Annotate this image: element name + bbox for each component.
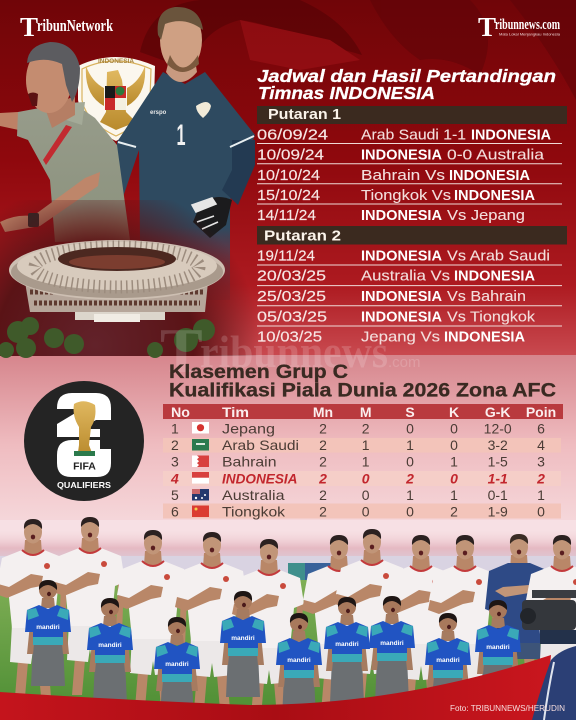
row Australia: 5 bbox=[171, 487, 179, 503]
match row 10/09/24: 0-0 Australia bbox=[447, 148, 545, 164]
goalkeeper shirt number: 1 bbox=[176, 119, 186, 152]
logo: Tribunnews.com: Mata Lokal Menjangkau Indonesia bbox=[499, 32, 561, 36]
row Tiongkok: 1-9 bbox=[488, 504, 508, 520]
crest: Indonesia garuda shield bbox=[78, 57, 155, 141]
match row 15/10/24: Tiongkok Vs bbox=[361, 188, 451, 204]
table: group C standings bbox=[163, 404, 563, 520]
row INDONESIA highlighted: 0 bbox=[450, 470, 458, 486]
panel: schedule round 2 bbox=[257, 226, 567, 346]
logo: TribunNetwork: T bbox=[20, 12, 38, 42]
match row 25/03/25: INDONESIA bbox=[361, 289, 443, 305]
match row 10/09/24 bbox=[257, 148, 545, 164]
row Bahrain: 3 bbox=[171, 454, 179, 470]
logo: TribunNetwork: ribunNetwork bbox=[37, 16, 113, 35]
match row 20/03/25: Australia Vs bbox=[361, 268, 450, 284]
watermark: Tribunnews.com: .com bbox=[388, 354, 421, 371]
row Australia bbox=[171, 487, 545, 503]
badge: FIFA 26 qualifiers: QUALIFIERS bbox=[57, 480, 111, 490]
table header: Mn bbox=[313, 404, 333, 420]
logo: TribunNetwork bbox=[20, 12, 113, 42]
row Australia: 2 bbox=[319, 487, 327, 503]
row Bahrain: 1 bbox=[450, 454, 458, 470]
row Tiongkok: 2 bbox=[450, 504, 458, 520]
match row 20/03/25 bbox=[257, 268, 536, 284]
match row 20/03/25: INDONESIA bbox=[454, 268, 536, 284]
row Bahrain: 1 bbox=[362, 454, 370, 470]
background: lower pink panel bbox=[0, 355, 576, 555]
match row 25/03/25: Vs Bahrain bbox=[447, 289, 526, 305]
row Jepang: 0 bbox=[406, 420, 414, 436]
red banner bbox=[0, 655, 551, 720]
row Australia: 1 bbox=[450, 487, 458, 503]
badge: FIFA 26 qualifiers: FIFA bbox=[73, 460, 96, 472]
match row 10/10/24 bbox=[257, 168, 531, 184]
match row 14/11/24: INDONESIA bbox=[361, 208, 443, 224]
watermark: Tribunnews.com: T bbox=[160, 315, 203, 386]
watermark: Tribunnews.com: ribunnews bbox=[200, 326, 388, 377]
match row 10/09/24: 10/09/24 bbox=[257, 148, 324, 164]
foreground person in blue bbox=[532, 646, 576, 720]
row Bahrain: 2 bbox=[319, 454, 327, 470]
row Jepang bbox=[171, 420, 545, 436]
team photo: child mascots bbox=[25, 580, 521, 720]
match row 10/03/25: 10/03/25 bbox=[257, 330, 322, 346]
heading: schedule title bbox=[257, 66, 556, 103]
heading: standings title: Klasemen Grup C bbox=[169, 362, 348, 383]
row Australia: 0-1 bbox=[488, 487, 508, 503]
row Arab Saudi: 2 bbox=[171, 437, 179, 453]
row INDONESIA highlighted: INDONESIA bbox=[222, 470, 298, 486]
round 2 header: Putaran 2 bbox=[264, 228, 341, 245]
row Arab Saudi: 4 bbox=[537, 437, 545, 453]
stadium bbox=[0, 200, 262, 358]
row INDONESIA highlighted: 2 bbox=[318, 470, 327, 486]
panel: schedule round 1 bbox=[257, 106, 567, 224]
badge: FIFA 26 qualifiers bbox=[24, 381, 144, 501]
match row 19/11/24 bbox=[257, 249, 550, 265]
row Jepang: 12-0 bbox=[484, 420, 512, 436]
crest: Indonesia garuda shield: INDONESIA bbox=[98, 58, 134, 65]
row Australia: 1 bbox=[537, 487, 545, 503]
watermark: Tribunnews.com bbox=[160, 315, 421, 386]
row Tiongkok: 6 bbox=[171, 504, 179, 520]
heading: schedule title: Timnas INDONESIA bbox=[258, 83, 435, 103]
match row 05/03/25: INDONESIA bbox=[361, 309, 443, 325]
photo credit: Foto: TRIBUNNEWS/HERUDIN bbox=[450, 703, 565, 713]
match row 15/10/24: 15/10/24 bbox=[257, 188, 320, 204]
row Tiongkok: 0 bbox=[406, 504, 414, 520]
match row 06/09/24: 06/09/24 bbox=[257, 127, 328, 143]
round 1 header bbox=[257, 106, 567, 124]
row INDONESIA highlighted bbox=[170, 470, 545, 486]
match row 10/10/24: INDONESIA bbox=[449, 168, 531, 184]
match row 19/11/24: INDONESIA bbox=[361, 249, 443, 265]
row Arab Saudi: 1 bbox=[362, 437, 370, 453]
row INDONESIA highlighted: 4 bbox=[170, 470, 179, 486]
row Arab Saudi: 1 bbox=[406, 437, 414, 453]
match row 25/03/25: 25/03/25 bbox=[257, 289, 326, 305]
match row 05/03/25: 05/03/25 bbox=[257, 309, 327, 325]
row Arab Saudi bbox=[171, 437, 545, 453]
row INDONESIA highlighted: 0 bbox=[362, 470, 370, 486]
background: eagle silhouette bbox=[140, 0, 576, 100]
round 1 header: Putaran 1 bbox=[268, 106, 341, 123]
row Tiongkok: 0 bbox=[362, 504, 370, 520]
match row 14/11/24 bbox=[257, 208, 525, 224]
table header: Tim bbox=[222, 404, 249, 420]
goalkeeper figure: erspo bbox=[150, 110, 167, 116]
row Tiongkok bbox=[171, 504, 545, 520]
match row 06/09/24 bbox=[257, 127, 552, 143]
heading: standings title bbox=[169, 362, 556, 402]
row Arab Saudi: Arab Saudi bbox=[222, 437, 299, 453]
stadium trees bbox=[0, 317, 215, 358]
match row 10/10/24: Bahrain Vs bbox=[361, 168, 445, 184]
row Arab Saudi: 3-2 bbox=[488, 437, 508, 453]
match row 06/09/24: Arab Saudi 1-1 bbox=[361, 127, 466, 143]
match row 10/03/25 bbox=[257, 330, 526, 346]
heading: standings title: Kualifikasi Piala Dunia 2026 Zona AFC bbox=[169, 381, 556, 402]
row Bahrain: 0 bbox=[406, 454, 414, 470]
table header: G-K bbox=[485, 404, 511, 420]
table header bbox=[163, 404, 563, 420]
row Jepang: 6 bbox=[537, 420, 545, 436]
row Australia: 0 bbox=[362, 487, 370, 503]
broadcast camera bbox=[520, 590, 576, 644]
match row 15/10/24 bbox=[257, 188, 536, 204]
table header: No bbox=[171, 404, 190, 420]
row Jepang: 2 bbox=[319, 420, 327, 436]
row INDONESIA highlighted: 1-1 bbox=[488, 470, 508, 486]
background: upper red panel bbox=[0, 0, 576, 356]
match row 10/10/24: 10/10/24 bbox=[257, 168, 320, 184]
row Arab Saudi: 0 bbox=[450, 437, 458, 453]
table header: M bbox=[360, 404, 372, 420]
row Tiongkok: 0 bbox=[537, 504, 545, 520]
round 2 header bbox=[257, 226, 567, 245]
team photo: players standing bbox=[0, 517, 576, 717]
logo: Tribunnews.com bbox=[478, 12, 561, 42]
row INDONESIA highlighted: 2 bbox=[405, 470, 414, 486]
match row 10/03/25: INDONESIA bbox=[444, 330, 526, 346]
row Australia: Australia bbox=[222, 487, 285, 503]
row Bahrain: 1-5 bbox=[488, 454, 508, 470]
match row 06/09/24: INDONESIA bbox=[471, 127, 552, 143]
row INDONESIA highlighted: 2 bbox=[536, 470, 545, 486]
row Jepang: 1 bbox=[171, 420, 179, 436]
match row 14/11/24: 14/11/24 bbox=[257, 208, 316, 224]
match row 15/10/24: INDONESIA bbox=[454, 188, 536, 204]
badge trophy bbox=[74, 401, 96, 456]
heading: schedule title: Jadwal dan Hasil Pertandingan bbox=[257, 66, 556, 86]
row Jepang: 0 bbox=[450, 420, 458, 436]
coach figure bbox=[0, 42, 130, 242]
match row 19/11/24: 19/11/24 bbox=[257, 249, 315, 265]
match row 10/09/24: INDONESIA bbox=[361, 148, 443, 164]
row Australia: 1 bbox=[406, 487, 414, 503]
match row 25/03/25 bbox=[257, 289, 526, 305]
table header: K bbox=[449, 404, 459, 420]
match row 05/03/25: Vs Tiongkok bbox=[447, 309, 536, 325]
row Bahrain bbox=[171, 454, 545, 470]
logo: Tribunnews.com: T bbox=[478, 12, 496, 42]
row Tiongkok: 2 bbox=[319, 504, 327, 520]
table header: S bbox=[405, 404, 415, 420]
match row 14/11/24: Vs Jepang bbox=[447, 208, 525, 224]
background: stadium crowd and pitch bbox=[0, 520, 576, 720]
goalkeeper figure bbox=[117, 7, 255, 300]
badge numerals 26 bbox=[57, 393, 111, 477]
match row 05/03/25 bbox=[257, 309, 536, 325]
row Bahrain: Bahrain bbox=[222, 454, 276, 470]
match row 10/03/25: Jepang Vs bbox=[361, 330, 440, 346]
row Arab Saudi: 2 bbox=[319, 437, 327, 453]
row Tiongkok: Tiongkok bbox=[222, 504, 286, 520]
row Jepang: Jepang bbox=[222, 420, 275, 436]
match row 20/03/25: 20/03/25 bbox=[257, 268, 326, 284]
match row 19/11/24: Vs Arab Saudi bbox=[447, 249, 550, 265]
row Jepang: 2 bbox=[362, 420, 370, 436]
row Bahrain: 3 bbox=[537, 454, 545, 470]
table header: Poin bbox=[526, 404, 556, 420]
